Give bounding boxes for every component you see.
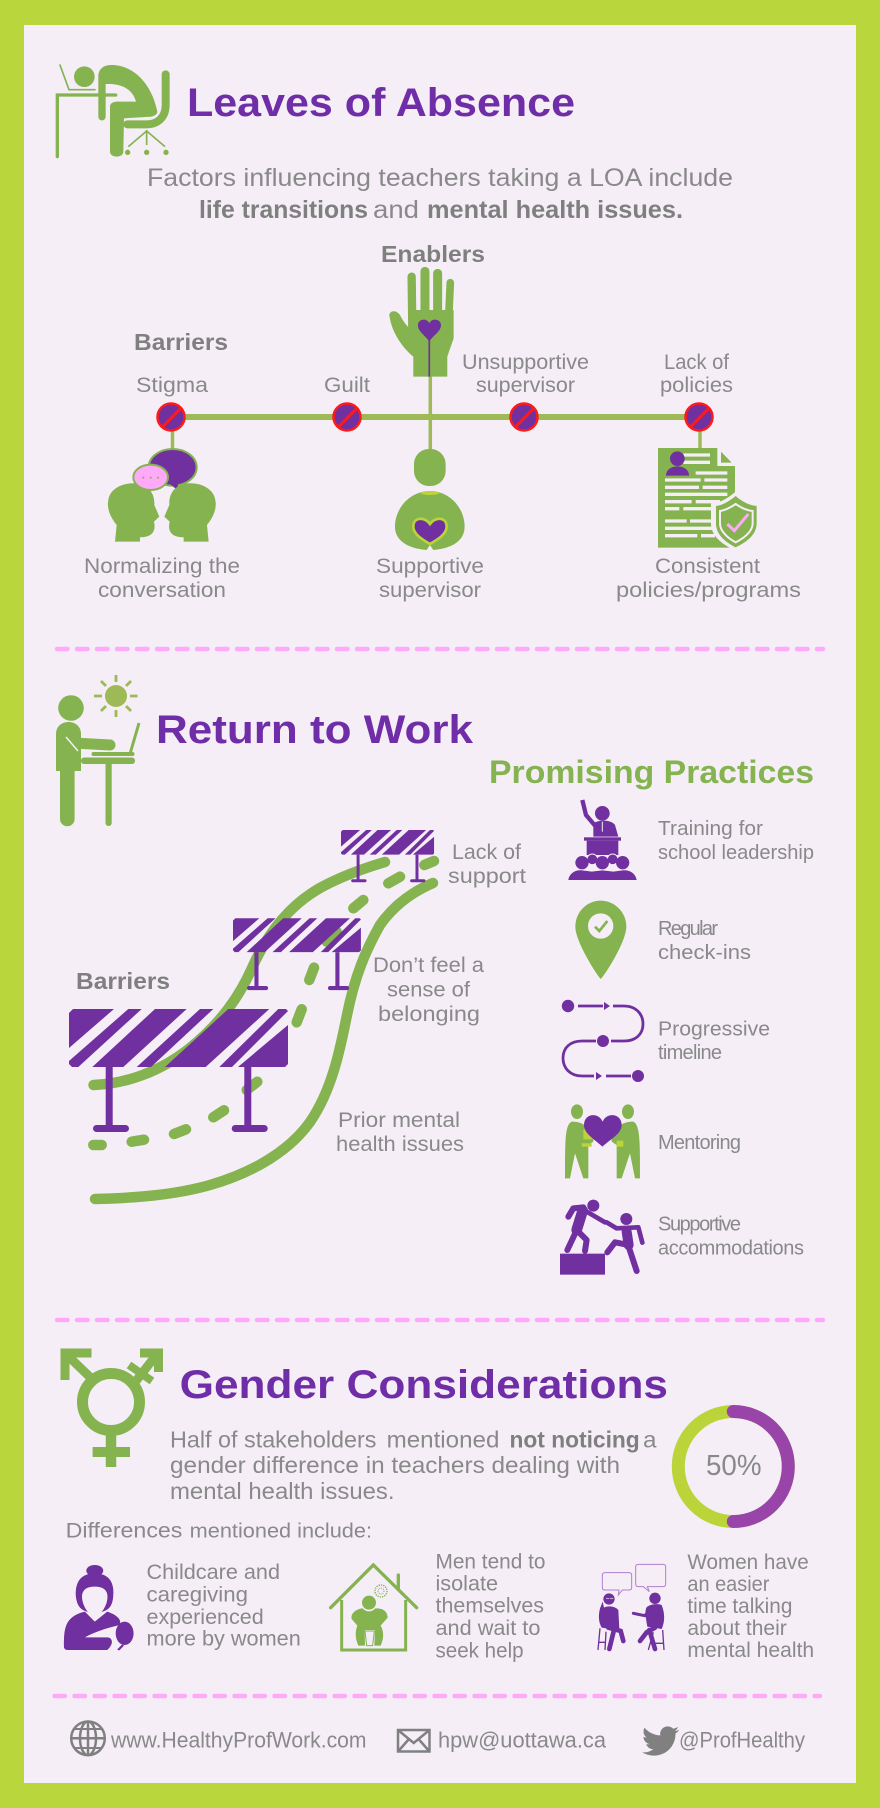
barrier: sense of belonging — [233, 918, 361, 990]
text: men tend to isolate: themselves — [436, 1595, 544, 1618]
chart: winding road with barriers — [69, 830, 434, 1199]
text: women have an easier time: about their — [687, 1617, 787, 1640]
footer: contact details — [71, 1722, 805, 1756]
icon: supportive accommodations — [560, 1200, 642, 1275]
barrier labels: policies — [660, 374, 733, 397]
barrier labels: Unsupportive — [462, 351, 589, 374]
text: half of stakeholders — [170, 1427, 657, 1504]
text: half of stakeholders: mental health issues. — [170, 1478, 394, 1504]
barrier labels: supervisor — [476, 374, 575, 397]
text: half of stakeholders: a — [643, 1427, 657, 1453]
icon: policy document with shield — [658, 448, 760, 551]
text: childcare and caregiving: experienced — [146, 1606, 264, 1629]
text: progressive timeline: Progressive — [658, 1018, 770, 1040]
barrier labels — [136, 351, 733, 397]
icon: two heads talking — [108, 449, 216, 542]
heading: enablers: Enablers — [381, 241, 485, 267]
text: regular check-ins — [658, 918, 751, 964]
title: leaves of absence: Leaves of Absence — [187, 81, 575, 125]
icon: bird — [642, 1726, 679, 1756]
intro text — [147, 164, 733, 224]
text: women have an easier time: Women have — [687, 1551, 809, 1574]
text: regular check-ins: Regular — [658, 918, 718, 940]
heading: promising practices: Promising Practices — [489, 754, 814, 790]
enabler labels — [84, 555, 801, 602]
chart: donut 50% — [678, 1412, 788, 1522]
text: half of stakeholders: Half of stakeholders — [170, 1427, 376, 1453]
text: women have an easier time — [687, 1551, 814, 1662]
title: gender considerations: Gender Considerations — [180, 1363, 668, 1407]
text: supportive accommodations — [658, 1214, 804, 1260]
heading: barriers: Barriers — [76, 968, 170, 994]
text: men tend to isolate: Men tend to — [436, 1550, 546, 1573]
chart: donut 50%: 50% — [706, 1450, 762, 1482]
text: supportive accommodations: accommodations — [658, 1238, 804, 1260]
icon: location pin with check — [575, 901, 626, 979]
text: childcare and caregiving: caregiving — [146, 1584, 248, 1607]
section: leaves of absence — [57, 65, 801, 602]
text: differences mentioned include: Differences — [66, 1520, 182, 1543]
text: men tend to isolate: isolate — [436, 1573, 498, 1596]
enabler labels: Supportive — [376, 555, 484, 578]
text: childcare and caregiving: more by women — [146, 1628, 301, 1651]
icon: hand with heart — [389, 271, 454, 377]
icon: person slumped at desk — [57, 65, 169, 157]
road — [93, 861, 434, 1199]
icon: supportive supervisor — [395, 449, 465, 550]
text: progressive timeline — [658, 1018, 770, 1064]
barrier labels: support — [448, 865, 526, 888]
text: men tend to isolate: seek help — [436, 1639, 524, 1662]
text: supportive accommodations: Supportive — [658, 1214, 741, 1236]
barrier labels: health issues — [336, 1133, 464, 1156]
text: childcare and caregiving: Childcare and — [146, 1561, 280, 1584]
text: differences mentioned include: mentioned include: — [190, 1521, 372, 1543]
barrier labels: Guilt — [324, 374, 370, 397]
no-symbol: unsupportive supervisor — [510, 404, 538, 430]
icon: man isolated in house — [331, 1565, 417, 1650]
barrier labels: belonging — [378, 1003, 480, 1026]
icon: progressive timeline — [562, 1000, 644, 1082]
text: women have an easier time: time talking — [687, 1595, 792, 1618]
icon: speaker at podium — [568, 800, 637, 880]
barrier labels — [336, 841, 526, 1156]
icon: mentoring — [565, 1104, 640, 1178]
barrier labels: Stigma — [136, 374, 208, 397]
icon: transgender symbol — [65, 1353, 158, 1467]
icon: woman holding child — [64, 1565, 134, 1650]
text: women have an easier time: mental health — [687, 1639, 814, 1662]
text: training for school leadership — [658, 818, 814, 864]
icon: envelope — [398, 1730, 430, 1752]
barrier labels: sense of — [387, 978, 470, 1002]
text: half of stakeholders: mentioned — [387, 1427, 499, 1453]
section: return to work — [56, 675, 814, 1275]
icon: two women talking — [598, 1564, 666, 1650]
text: half of stakeholders: gender difference in teachers dealing with — [170, 1452, 620, 1478]
text: website: www.HealthyProfWork.com — [110, 1727, 367, 1752]
heading: barriers: Barriers — [134, 329, 228, 355]
no-symbol: guilt — [334, 404, 360, 430]
text: mentoring: Mentoring — [658, 1132, 741, 1154]
text: men tend to isolate — [436, 1550, 546, 1662]
enabler labels: supervisor — [379, 579, 481, 602]
text: childcare and caregiving — [146, 1561, 301, 1651]
title: return to work: Return to Work — [156, 708, 474, 752]
no-symbol: lack of policies — [686, 404, 712, 430]
barrier labels: Don’t feel a — [373, 954, 484, 977]
text: half of stakeholders: not noticing — [510, 1427, 640, 1453]
text: men tend to isolate: and wait to — [436, 1617, 540, 1640]
icon: globe — [71, 1722, 105, 1755]
barrier labels: Prior mental — [338, 1109, 460, 1132]
barrier: prior mental health issues — [69, 1009, 288, 1132]
enabler labels: Normalizing the — [84, 555, 240, 578]
connector lines — [171, 372, 700, 452]
text: progressive timeline: timeline — [658, 1042, 722, 1064]
section: gender considerations — [64, 1353, 814, 1662]
no-symbol: stigma — [158, 404, 184, 430]
text: regular check-ins: check-ins — [658, 942, 751, 964]
text: differences mentioned include — [66, 1520, 372, 1543]
text: training for school leadership: Training for — [658, 818, 763, 840]
intro text: and — [373, 196, 419, 224]
intro text: mental health issues. — [427, 196, 683, 224]
enabler labels: conversation — [98, 579, 226, 602]
text: women have an easier time: an easier — [687, 1573, 769, 1596]
enabler labels: policies/programs — [616, 579, 801, 602]
intro text: life transitions — [199, 196, 368, 224]
intro text: Factors influencing teachers taking a LOA include — [147, 164, 733, 192]
barrier labels: Lack of — [664, 351, 729, 374]
icon: person at standing desk with sun — [56, 675, 139, 826]
barrier: lack of support — [341, 830, 434, 882]
text: twitter handle: @ProfHealthy — [679, 1727, 805, 1752]
barrier labels: Lack of — [452, 841, 521, 864]
enabler labels: Consistent — [655, 555, 760, 578]
text: training for school leadership: school leadership — [658, 842, 814, 864]
text: email: hpw@uottawa.ca — [438, 1727, 607, 1752]
